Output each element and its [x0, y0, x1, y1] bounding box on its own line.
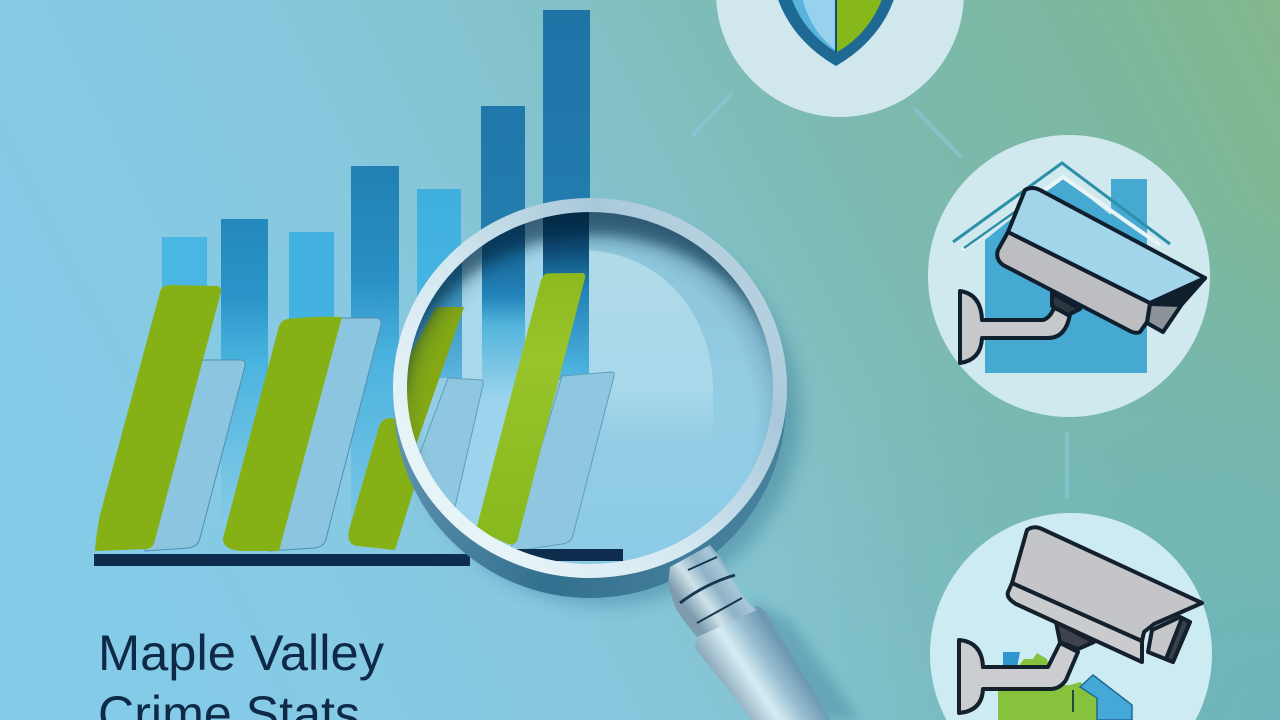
badge circle [930, 513, 1212, 720]
handle shadow [750, 600, 860, 720]
axis baseline [94, 554, 470, 566]
icon: shield [773, 0, 899, 66]
axis in lens [516, 549, 623, 561]
dark hood edge [1150, 278, 1205, 305]
panel: neighborhood camera [930, 513, 1212, 720]
badge circle [716, 0, 964, 117]
camera lens [1147, 278, 1205, 332]
panel: shield badge [716, 0, 964, 117]
handle [668, 545, 830, 720]
lens contents [407, 212, 773, 564]
icon: neighborhood houses [998, 652, 1132, 720]
camera top [1012, 527, 1202, 641]
handle shaft [695, 606, 830, 720]
glass shadow [410, 225, 800, 605]
icon: roof lines [953, 163, 1170, 250]
back bars [162, 10, 590, 546]
magnified back bars [400, 200, 589, 550]
pale light patch [589, 250, 713, 422]
lower rim [394, 208, 786, 598]
icon: house [985, 177, 1147, 373]
handle collar [668, 545, 757, 637]
bar chart [95, 10, 590, 551]
camera underside [1008, 583, 1142, 662]
camera lens [1148, 617, 1190, 662]
neck [1052, 293, 1080, 315]
green slanted bars [95, 285, 420, 551]
icon: security camera [959, 527, 1202, 713]
badge circle [928, 135, 1210, 417]
magnifying glass [370, 198, 860, 720]
top dark crescent [407, 212, 770, 398]
connector lines [694, 94, 1067, 497]
magnified green bar right [476, 273, 585, 544]
icon: security camera [960, 188, 1205, 363]
magnified green bar left [407, 307, 464, 444]
wall bracket [959, 640, 1078, 713]
wall bracket [960, 291, 1070, 363]
camera top [1008, 188, 1205, 303]
camera underside [997, 232, 1150, 333]
small green piece [411, 420, 412, 424]
title [98, 625, 384, 720]
inner lens shade [407, 212, 773, 450]
panel: home security camera [928, 135, 1210, 417]
title: Maple Valley [98, 625, 384, 681]
metal ring [400, 205, 780, 571]
pale slanted bars [145, 318, 381, 551]
neck [1056, 622, 1094, 649]
magnified pale bars [400, 372, 614, 552]
